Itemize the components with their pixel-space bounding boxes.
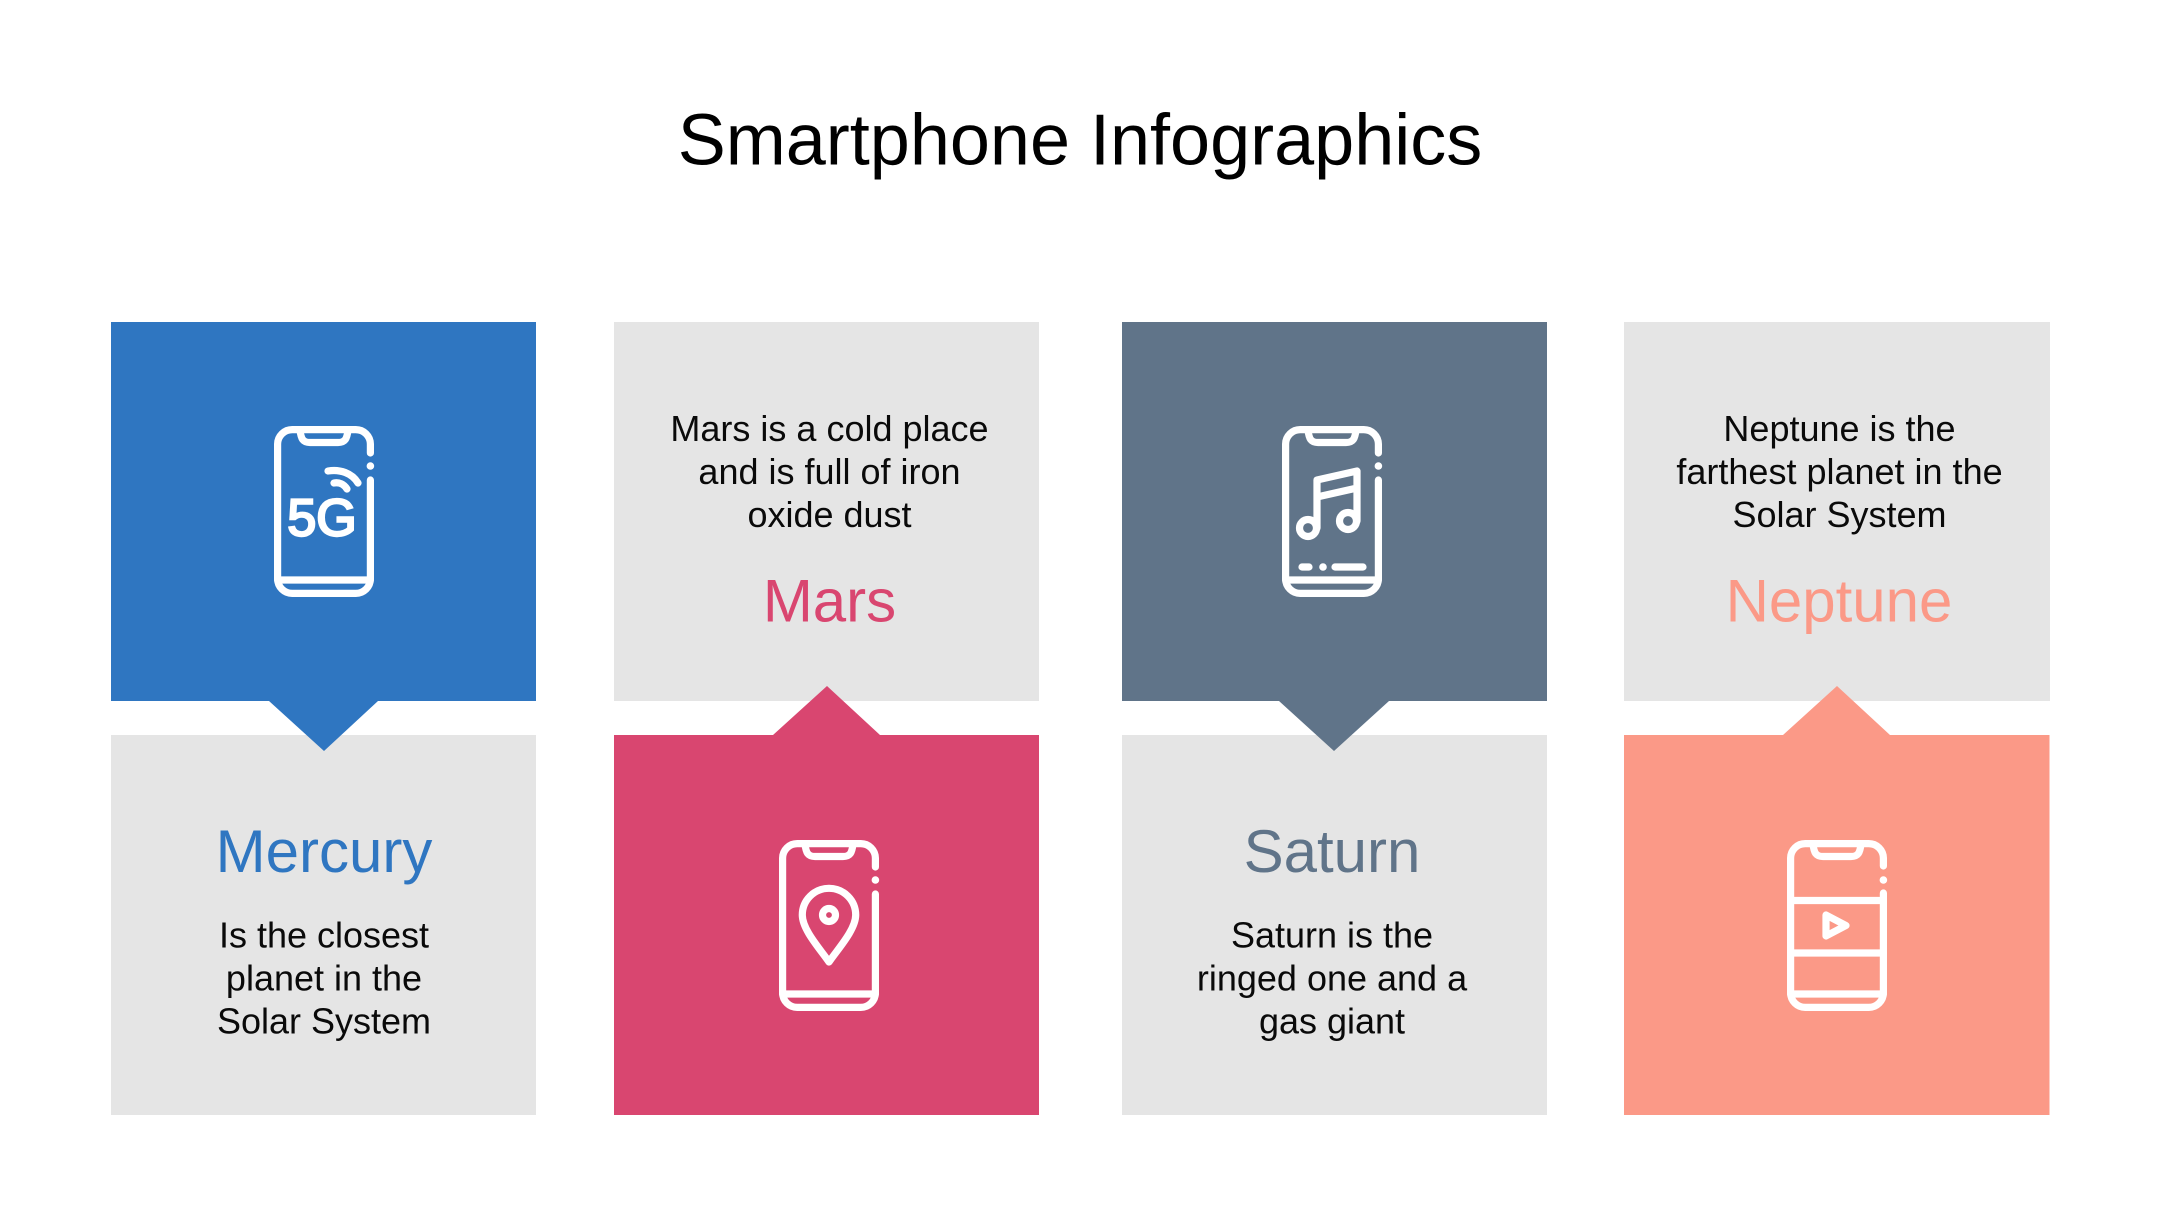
Mercury description: planet in the <box>226 958 422 998</box>
Mars heading: Mars <box>763 568 896 634</box>
Saturn description: ringed one and a <box>1197 958 1468 998</box>
Neptune colored callout with upward arrow <box>1624 686 2050 1115</box>
icon: smartphone with video player <box>1791 844 1887 1007</box>
icon: smartphone with 5G: 5G <box>287 490 357 548</box>
Mercury heading: Mercury <box>216 818 432 885</box>
Mars text panel <box>614 322 1039 701</box>
icon: smartphone with 5G <box>278 430 374 593</box>
Mercury text panel <box>111 735 536 1115</box>
panel: Mars column <box>614 322 1039 1115</box>
Saturn description: gas giant <box>1259 1000 1405 1042</box>
title: Smartphone Infographics <box>678 100 1482 180</box>
Mercury description: Is the closest <box>219 914 429 956</box>
icon: smartphone with map pin <box>783 844 879 1007</box>
Mars colored callout with upward arrow <box>614 686 1039 1115</box>
Saturn heading: Saturn <box>1244 818 1420 885</box>
Mercury description: Solar System <box>217 1000 431 1042</box>
Saturn text panel <box>1122 735 1547 1115</box>
Saturn description: Saturn is the <box>1231 914 1433 956</box>
Mars description: oxide dust <box>747 494 912 535</box>
panel: Mercury column <box>111 322 536 1115</box>
Neptune heading: Neptune <box>1726 568 1952 634</box>
icon: smartphone with music note <box>1286 430 1382 593</box>
Neptune description: Neptune is the <box>1723 408 1956 449</box>
Saturn colored callout with downward arrow <box>1122 322 1547 751</box>
Neptune description: Solar System <box>1732 494 1947 535</box>
Mercury colored callout with downward arrow <box>111 322 536 751</box>
Neptune description: farthest planet in the <box>1676 451 2003 492</box>
panel: Saturn column <box>1122 322 1547 1115</box>
Neptune text panel <box>1624 322 2050 701</box>
Mars description: and is full of iron <box>698 451 961 492</box>
panel: Neptune column <box>1624 322 2050 1115</box>
Mars description: Mars is a cold place <box>670 408 989 449</box>
